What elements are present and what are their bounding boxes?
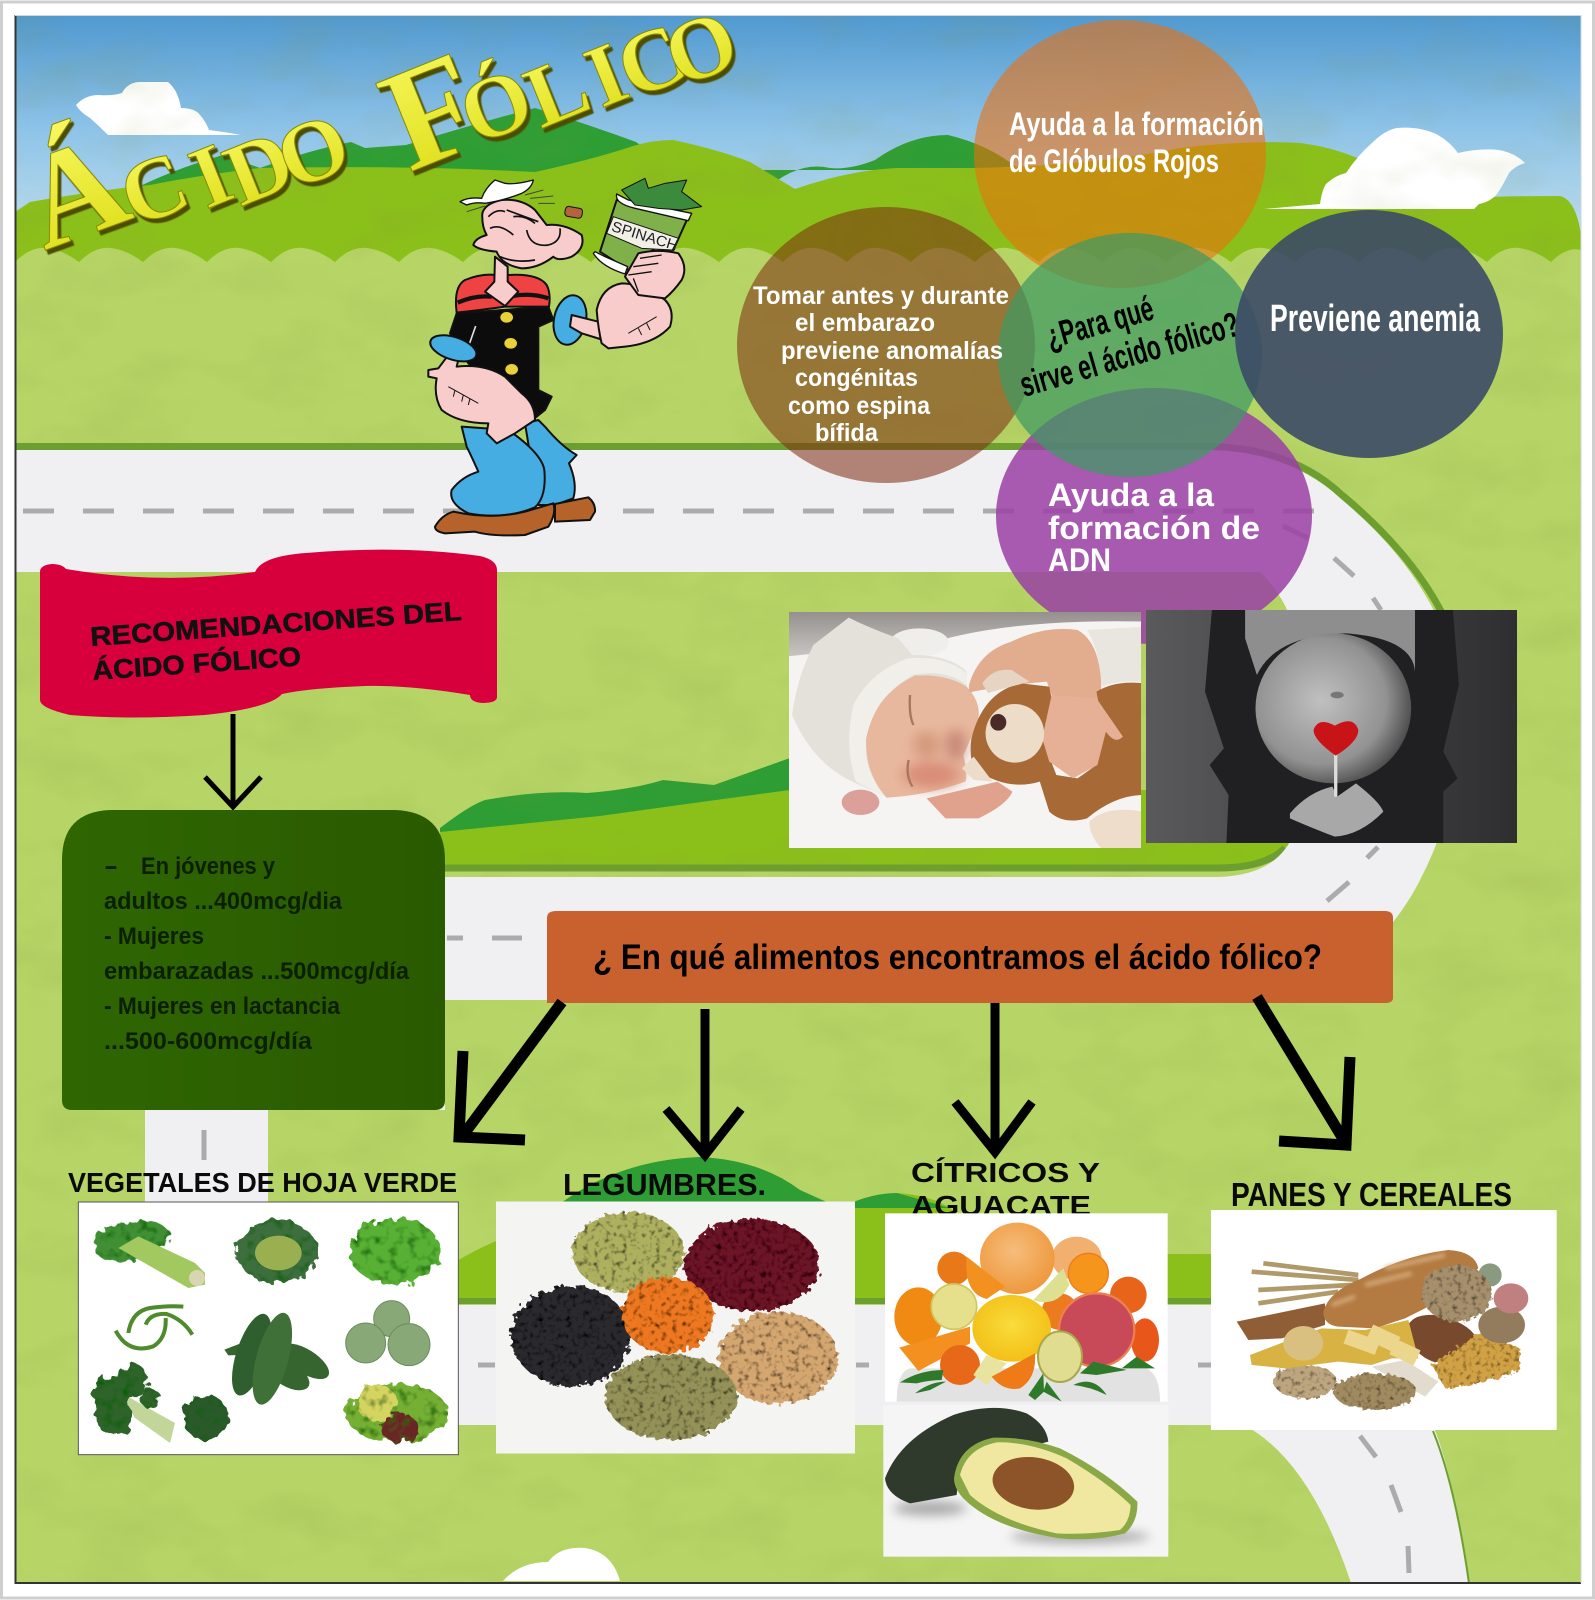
yellow grapefruit: [972, 1295, 1051, 1362]
hat: [792, 618, 967, 797]
eye lines: [908, 695, 913, 787]
avocado shadows: [893, 1501, 1150, 1543]
rose: [1494, 1283, 1528, 1313]
hair: [467, 190, 555, 212]
yellow pasta: [1250, 1320, 1418, 1368]
photo: pregnant belly with heart: [1144, 605, 1521, 852]
head: [473, 200, 583, 268]
title: Ácido Fólico: D: [212, 112, 307, 225]
arrow: to citrus: [955, 1003, 1032, 1152]
pasta tubes: [1343, 1324, 1421, 1366]
front shoe: [435, 503, 554, 535]
venn text: glóbulos rojos: de Glóbulos Rojos: [1009, 143, 1219, 179]
label: panes y cereales: PANES Y CEREALES: [1231, 1176, 1512, 1213]
pipe: [564, 206, 583, 219]
label: cítricos y aguacate: CÍTRICOS Y: [911, 1157, 1100, 1188]
venn text: glóbulos rojos: [1009, 106, 1264, 179]
left cuff: [427, 330, 480, 367]
hand: [1042, 695, 1123, 778]
banner: recomendaciones: [40, 550, 497, 718]
grain center: [1333, 1373, 1417, 1410]
hills back dark: [142, 108, 1016, 186]
panel: recommended doses: [62, 810, 445, 1110]
chickpeas: [718, 1312, 838, 1404]
photo: bread and cereals: [1211, 1210, 1557, 1430]
photo: citrus fruit: [883, 1213, 1168, 1557]
cloud: right: [1264, 128, 1525, 209]
hat rim: [849, 658, 967, 798]
celery base: [189, 1270, 205, 1286]
label: legumbres: LEGUMBRES.: [563, 1167, 766, 1202]
cut avocado skin: [954, 1438, 1137, 1539]
road: outer edge lower: [1433, 1431, 1469, 1583]
shirt: [1245, 608, 1415, 675]
lower band line: [450, 1298, 1220, 1304]
arrow: to legumes: [666, 1009, 741, 1155]
backdrop: [1144, 605, 1521, 852]
dose text: embarazadas ...500mcg/día: [104, 958, 410, 985]
stitch right: [628, 317, 657, 335]
orange wedge bottom: [992, 1353, 1035, 1389]
venn: center question: [998, 233, 1262, 477]
road: upper edge: [15, 446, 1450, 630]
hat ball: [890, 628, 949, 656]
road: lower hill dark: [561, 1157, 950, 1208]
ear: [842, 790, 879, 815]
dose text: ...500-600mcg/día: [104, 1028, 313, 1055]
brown pasta: [1237, 1303, 1325, 1340]
venn text: embarazo: [753, 282, 1009, 447]
venn text: embarazo: congénitas: [795, 364, 918, 392]
navel: [1331, 692, 1344, 698]
leaves: [900, 1357, 1155, 1402]
field: mid hills: [440, 758, 789, 832]
hands: [1290, 783, 1383, 837]
label: cítricos y aguacate: [911, 1157, 1100, 1221]
lettuce: [349, 1218, 441, 1285]
panel: question about foods: [547, 911, 1393, 1003]
black beans: [511, 1286, 631, 1386]
venn text: embarazo: como espina: [788, 392, 931, 420]
dose text: - Mujeres en lactancia: [104, 993, 341, 1020]
broccoli big: [93, 1365, 160, 1435]
loaf: [1323, 1250, 1478, 1328]
arrow: banner to dose box: [205, 714, 261, 807]
venn text: anemia: Previene anemia: [1270, 298, 1481, 340]
stitch left: [448, 387, 478, 405]
road: dashes: [23, 511, 1409, 1573]
grain left: [1273, 1365, 1337, 1398]
illustration: Popeye with spinach: [427, 178, 702, 535]
banner text: RECOMENDACIONES DEL: [89, 596, 463, 652]
leaf cluster: [1478, 1263, 1502, 1287]
wheat: [1252, 1263, 1358, 1303]
venn: embarazo: [737, 207, 1035, 483]
lemon wedge: [973, 1355, 1007, 1385]
salad yellow: [357, 1385, 397, 1421]
dose text: - Mujeres: [104, 923, 204, 950]
lemon slice: [931, 1284, 977, 1329]
label: vegetales: VEGETALES DE HOJA VERDE: [68, 1167, 457, 1198]
title: Ácido Fólico: O: [263, 94, 363, 209]
rice: [1372, 1360, 1438, 1397]
venn text: ADN: formación de: [1048, 510, 1260, 546]
corn: [1432, 1332, 1520, 1388]
spinach leaves: [622, 178, 702, 210]
right oranges: [1110, 1277, 1147, 1313]
can rims: [593, 194, 692, 274]
jacket mark: [469, 326, 476, 345]
photo: legumes: [496, 1202, 855, 1454]
teddy ear: [982, 670, 1029, 693]
celery stalks: [118, 1236, 205, 1288]
neck and arrow: [485, 257, 518, 306]
forearm: [597, 283, 672, 348]
face lines: [488, 210, 560, 261]
arrow: to bread: [1257, 997, 1350, 1145]
venn text: embarazo: Tomar antes y durante: [753, 282, 1009, 310]
small bun right: [1478, 1307, 1525, 1343]
pink grapefruit: [1059, 1293, 1134, 1367]
venn text: embarazo: previene anomalías: [781, 337, 1003, 365]
title: Ácido Fólico: I: [177, 125, 245, 228]
title: Ácido Fólico: F: [361, 21, 503, 202]
venn text: glóbulos rojos: Ayuda a la formación: [1009, 106, 1264, 142]
teddy foot: [1089, 810, 1144, 848]
cloud: bottom: [503, 1548, 620, 1581]
title: Ácido Fólico: C: [107, 133, 202, 246]
dose text: -: [104, 853, 118, 880]
fist: [625, 251, 684, 298]
cloud: left: [76, 82, 241, 135]
teddy body: [971, 683, 1144, 821]
salad red: [381, 1415, 419, 1443]
road: main winding shape: [16, 450, 1436, 1202]
venn text: center question: ¿Para qué: [1041, 289, 1158, 357]
venn text: embarazo: el embarazo: [795, 309, 935, 337]
mixed salad: [345, 1384, 448, 1442]
collar: [456, 275, 550, 313]
face: [866, 675, 979, 798]
title: Ácido Fólico: [3, 0, 751, 279]
wall gradient: [789, 612, 1141, 656]
broccoli stem: [118, 1391, 175, 1443]
can label: [607, 217, 678, 250]
orange wedge left: [899, 1327, 970, 1371]
buttons: [500, 312, 518, 375]
white sleeve: [1087, 627, 1144, 687]
venn text: ADN: ADN: [1048, 542, 1111, 578]
venn text: embarazo: bífida: [815, 419, 879, 447]
round bun: [1422, 1265, 1492, 1322]
avocado panel: [883, 1405, 1168, 1557]
green lentils: [605, 1354, 737, 1440]
venn text: center question: sirve el ácido fólico?: [1015, 305, 1243, 405]
front leg: [451, 427, 545, 516]
avocado flesh: [960, 1442, 1131, 1534]
fingers: [628, 255, 662, 292]
mid band shadow line: [440, 848, 1285, 868]
lower arm: [570, 315, 603, 340]
seed: [989, 1452, 1078, 1515]
dark clothing: [1205, 608, 1459, 847]
banner text: ÁCIDO FÓLICO: [91, 640, 302, 686]
road: lower bright hill band: [455, 1157, 1211, 1298]
heart: [1314, 721, 1358, 756]
belly: [1255, 633, 1411, 783]
title: Ácido Fólico: I: [572, 24, 640, 127]
field: mid bright band: [440, 790, 1289, 864]
left arm: [428, 355, 535, 443]
body and arm: [969, 628, 1102, 778]
round squash: [346, 1301, 430, 1366]
kidney beans: [684, 1219, 820, 1311]
whole avocado: [885, 1408, 1048, 1503]
venn: Previene anemia: [1235, 210, 1503, 458]
lime half: [1038, 1331, 1082, 1382]
dose text: adultos ...400mcg/dia: [104, 888, 343, 915]
cabbage heart: [255, 1236, 302, 1270]
hat: [460, 180, 533, 205]
celery leaves: [90, 1214, 173, 1268]
venn text: ADN: Ayuda a la: [1048, 477, 1214, 513]
title: Ácido Fólico: Á: [3, 106, 146, 279]
back zucchini: [224, 1337, 335, 1397]
lime wedge: [1033, 1268, 1069, 1302]
venn: Ayuda a la formación de Glóbulos Rojos: [974, 20, 1266, 288]
dark bun: [1407, 1315, 1477, 1362]
split peas: [572, 1212, 684, 1292]
label: cítricos y aguacate: AGUACATE: [911, 1190, 1091, 1221]
torso: [450, 307, 553, 423]
small orange: [940, 1345, 980, 1385]
teddy muzzle: [986, 704, 1044, 763]
pasta nest: [1283, 1326, 1323, 1361]
red lentils: [622, 1277, 714, 1353]
cabbage: [236, 1220, 317, 1283]
hills bright: [15, 140, 1581, 262]
title: Ácido Fólico: L: [512, 36, 603, 148]
question text: ¿ En qué alimentos encontramos el ácido fólico?: [593, 938, 1322, 977]
venn text: center question: [1015, 289, 1243, 405]
title: Ácido Fólico: C: [604, 5, 699, 118]
dose text: [104, 853, 410, 1055]
loaf highlights: [1332, 1255, 1445, 1305]
title: Ácido Fólico: Ó: [446, 49, 546, 164]
green beans: [116, 1306, 192, 1348]
orange slice: [1068, 1253, 1108, 1293]
back shoe: [555, 497, 595, 522]
back fruit: [937, 1252, 971, 1285]
photo: green vegetables: [78, 1202, 458, 1455]
arrow: to vegetables: [459, 1002, 562, 1140]
teddy nose: [990, 714, 1006, 731]
teddy white tuft: [962, 757, 993, 782]
fur: [789, 621, 1141, 848]
banner text: [89, 596, 463, 686]
right cuff: [549, 292, 591, 348]
shadow: [897, 1368, 1160, 1402]
back leg: [525, 420, 577, 505]
broccoli small: [183, 1395, 228, 1440]
tangerine wedge: [966, 1257, 1005, 1299]
venn: ADN: [996, 388, 1312, 644]
lower arm: [927, 782, 1012, 818]
front zucchini: [224, 1309, 300, 1409]
photo: sleeping baby with teddy: [785, 605, 1148, 852]
collar stripes: [458, 295, 548, 303]
cheek and nose: [903, 728, 963, 788]
can body: [600, 200, 688, 270]
dose text: En jóvenes y: [141, 853, 276, 880]
stick: [1332, 753, 1339, 797]
can text: SPINACH: [609, 219, 680, 254]
road: third road: [458, 1305, 1468, 1582]
venn text: ADN: [1048, 477, 1260, 578]
